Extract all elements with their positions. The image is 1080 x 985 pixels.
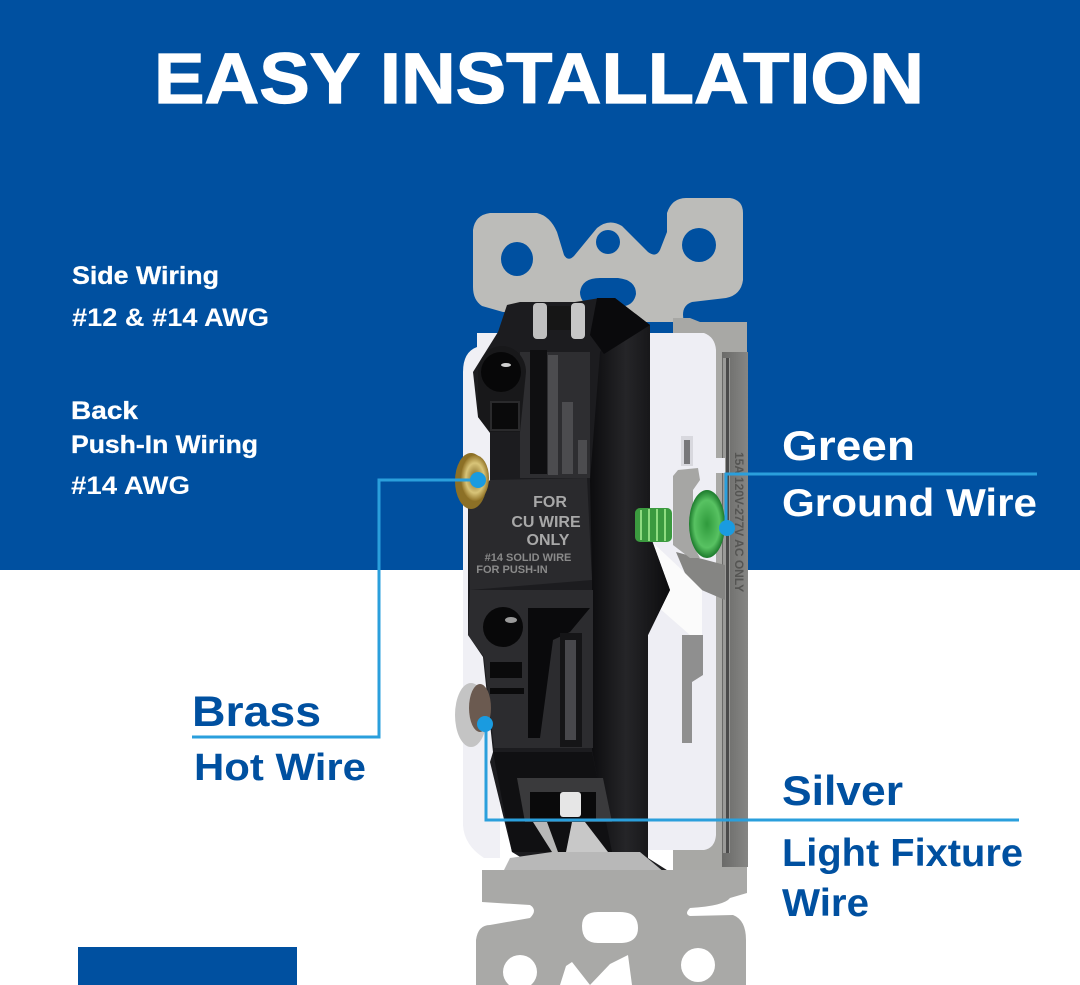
bottom mounting plate bbox=[476, 870, 747, 985]
body central column bbox=[590, 320, 670, 858]
text block: back push-in wiring: Push-In Wiring bbox=[71, 431, 258, 459]
lower black channel bbox=[528, 608, 590, 738]
white housing right bbox=[648, 333, 716, 850]
moulded marking text: CU WIRE bbox=[511, 514, 581, 531]
text block: side wiring: Side Wiring bbox=[72, 262, 219, 290]
green ground screw bbox=[635, 490, 725, 558]
moulded marking text: FOR bbox=[533, 494, 567, 511]
bottom terminal notch bbox=[493, 752, 612, 852]
blue box bottom bbox=[78, 947, 297, 985]
plate bottom cut-out bbox=[560, 955, 632, 985]
callout: green ground wire bbox=[719, 422, 1037, 536]
upper marking specks bbox=[548, 355, 587, 475]
callout: brass hot wire: Brass bbox=[192, 688, 321, 736]
callout: green ground wire: Green bbox=[782, 422, 915, 469]
callout: silver light fixture wire: Wire bbox=[782, 882, 869, 925]
top bevel strip bbox=[590, 298, 650, 354]
lower panel bbox=[468, 590, 593, 748]
housing slots and slider bbox=[681, 436, 693, 466]
callout: silver light fixture wire bbox=[477, 716, 1023, 925]
text block: back push-in wiring: #14 AWG bbox=[71, 472, 190, 500]
text block: back push-in wiring: Back bbox=[71, 397, 138, 425]
black switch body bbox=[468, 298, 670, 872]
metal strap bbox=[673, 318, 747, 880]
blue header background bbox=[0, 0, 1080, 570]
moulded marking text bbox=[476, 494, 581, 576]
top mounting plate bbox=[473, 198, 743, 322]
upper textured panel bbox=[520, 352, 590, 478]
moulded marking text: ONLY bbox=[527, 532, 570, 549]
ground screw bracket bbox=[673, 468, 700, 558]
text block: back push-in wiring bbox=[71, 397, 258, 500]
callout: silver light fixture wire: Silver bbox=[782, 767, 903, 814]
text block: side wiring: #12 & #14 AWG bbox=[72, 304, 269, 332]
brass screw bbox=[455, 453, 489, 509]
housing tab bbox=[713, 458, 725, 473]
callout: brass hot wire bbox=[192, 472, 486, 789]
white housing left bbox=[463, 333, 500, 858]
strap printed rating text: 15A 120V-277V AC ONLY bbox=[732, 452, 746, 592]
moulded marking text: #14 SOLID WIRE bbox=[485, 552, 571, 564]
callout: green ground wire: Ground Wire bbox=[782, 482, 1037, 525]
text block: side wiring bbox=[72, 262, 269, 332]
callout: brass hot wire: Hot Wire bbox=[194, 747, 366, 789]
callout: silver light fixture wire: Light Fixture bbox=[782, 832, 1023, 875]
title: EASY INSTALLATION bbox=[154, 40, 924, 119]
bottom metal clip bbox=[503, 822, 664, 872]
push-in hole bottom bbox=[483, 607, 524, 694]
switch device photo illustration bbox=[455, 198, 748, 985]
silver screw bbox=[455, 683, 491, 747]
moulded marking text: FOR PUSH-IN bbox=[476, 564, 548, 576]
lower block bbox=[468, 478, 592, 590]
top metal clip bbox=[533, 303, 585, 339]
push-in hole top bbox=[478, 346, 526, 432]
